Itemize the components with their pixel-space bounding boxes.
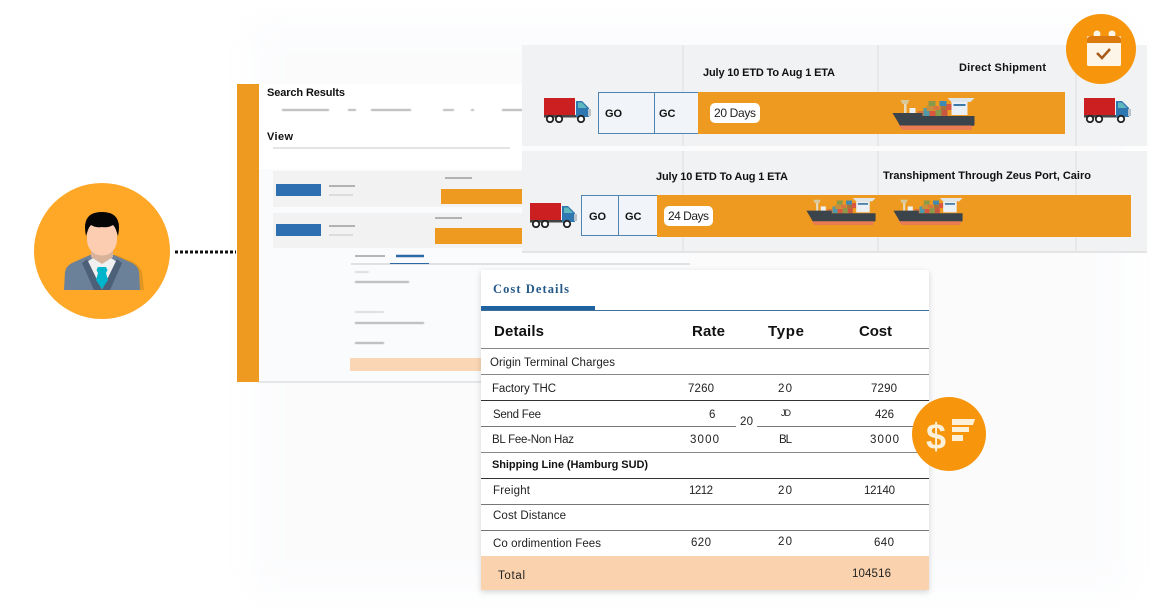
row: freight: 12140 — [864, 485, 895, 497]
GC cell — [618, 196, 658, 236]
panel: search results — [237, 84, 690, 383]
row: freight: Freight — [493, 485, 531, 497]
row: send fee — [493, 408, 894, 428]
row: coordination fees: 620 — [691, 537, 711, 549]
row: send fee: Send Fee — [493, 409, 541, 421]
row: freight — [493, 485, 895, 497]
icon: origin truck — [530, 203, 577, 227]
row: send fee: 426 — [875, 409, 894, 421]
row: factory THC: 20 — [778, 383, 792, 395]
icon: dollar badge: $ — [926, 416, 946, 457]
cost table — [481, 323, 929, 582]
total band — [481, 556, 929, 590]
table header: Details — [494, 323, 544, 340]
duration pill: 20 Days — [714, 106, 756, 120]
detail skeleton lines — [355, 272, 424, 343]
duration pill: 24 Days — [668, 209, 709, 223]
GO cell — [582, 196, 618, 236]
total bar, blurred panel — [350, 358, 481, 371]
row: coordination fees: Co ordimention Fees — [493, 538, 601, 550]
row: coordination fees — [493, 536, 894, 550]
row: factory THC: 7260 — [688, 383, 714, 395]
row: BL fee: 3000 — [690, 434, 719, 446]
row: BL fee — [492, 434, 899, 446]
result row two — [273, 213, 525, 248]
row: total — [498, 568, 891, 582]
table header: Cost — [859, 323, 892, 340]
row: total: 104516 — [852, 568, 891, 580]
row: freight: 20 — [778, 485, 792, 497]
row: total: Total — [498, 570, 525, 582]
date label: July 10 ETD To Aug 1 ETA — [656, 171, 788, 183]
row: cost distance: Cost Distance — [493, 510, 566, 522]
sidebar — [237, 84, 259, 382]
detail tabs — [351, 256, 690, 264]
icon: first ship — [806, 198, 876, 225]
active tab underline — [481, 306, 929, 310]
table header — [494, 323, 892, 340]
row: freight: 1212 — [689, 485, 713, 497]
row: coordination fees: 640 — [874, 537, 894, 549]
row: BL fee: BL — [779, 434, 793, 446]
duration pill — [664, 206, 713, 226]
panel: route direct shipment — [522, 45, 1147, 146]
row: send fee: 20 — [740, 416, 753, 428]
GO cell: GO — [589, 211, 607, 223]
transit bar — [698, 92, 1065, 134]
result row one — [273, 171, 525, 207]
icon: destination truck — [1084, 98, 1131, 122]
duration pill — [710, 103, 760, 123]
GC cell: GC — [659, 108, 676, 120]
panel: cost details — [481, 270, 929, 590]
date label: July 10 ETD To Aug 1 ETA — [703, 67, 835, 79]
route type label: Transhipment Through Zeus Port, Cairo — [883, 170, 1091, 182]
soft background glow — [250, 20, 1130, 595]
GO cell: GO — [605, 108, 623, 120]
search summary lines — [282, 109, 524, 111]
row: factory THC: 7290 — [871, 383, 897, 395]
connector: dotted line — [175, 250, 236, 254]
transit bar — [657, 195, 1131, 237]
icon: second ship — [893, 198, 963, 225]
row: shipping line: Shipping Line (Hamburg SUD) — [492, 459, 648, 471]
table header: Type — [768, 323, 804, 340]
icon: ship — [892, 98, 974, 130]
route type label: Direct Shipment — [959, 62, 1046, 74]
table header: Rate — [692, 323, 725, 340]
row: factory THC — [492, 383, 897, 395]
heading: cost details: Cost Details — [493, 282, 569, 296]
row: coordination fees: 20 — [778, 536, 792, 548]
row: send fee: 6 — [709, 409, 715, 421]
GC cell — [654, 92, 698, 134]
icon: person avatar — [34, 183, 170, 319]
icon: calendar badge — [1066, 14, 1136, 84]
row: send fee: JD — [781, 408, 792, 418]
panel: route transhipment — [522, 151, 1147, 253]
icon: dollar badge — [912, 397, 986, 471]
row: origin terminal charges: Origin Terminal Charges — [490, 357, 615, 369]
GC cell: GC — [625, 211, 642, 223]
row: BL fee: 3000 — [870, 434, 899, 446]
row: factory THC: Factory THC — [492, 383, 556, 395]
heading: view: View — [267, 131, 293, 143]
heading: search results: Search Results — [267, 87, 345, 99]
row: BL fee: BL Fee-Non Haz — [492, 434, 574, 446]
icon: origin truck — [544, 98, 591, 122]
GO cell — [598, 92, 654, 134]
